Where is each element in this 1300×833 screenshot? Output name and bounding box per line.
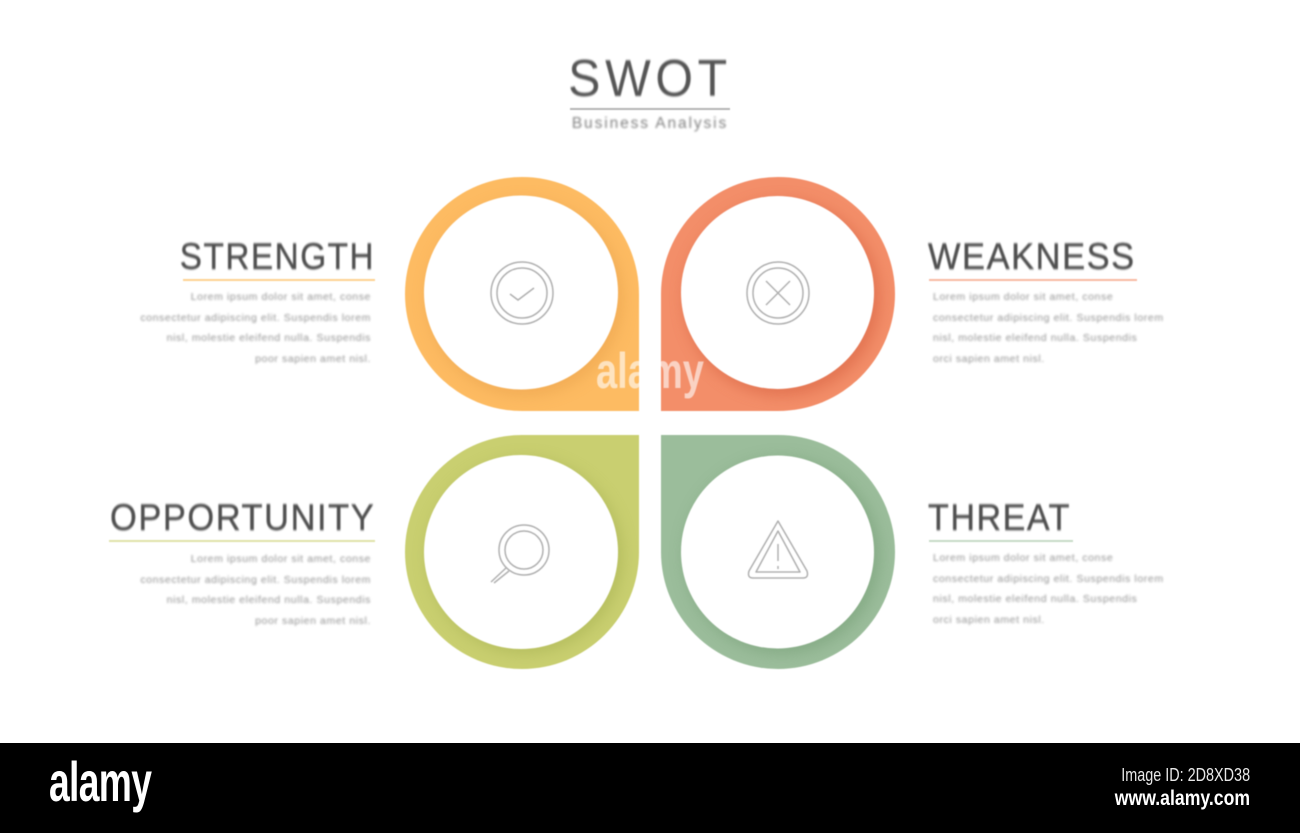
strength text: Lorem ipsum dolor sit amet, conse	[191, 291, 371, 303]
threat heading: THREAT	[928, 497, 1071, 538]
weakness text: consectetur adipiscing elit. Suspendis lorem	[933, 312, 1164, 324]
icon: check badge	[491, 262, 553, 324]
title rule	[570, 108, 730, 110]
image id: Image ID: 2D8XD38	[1121, 765, 1250, 785]
opportunity text	[140, 553, 371, 627]
website: www.alamy.com	[1115, 787, 1250, 810]
panel: strength teardrop	[405, 177, 639, 411]
weakness text: Lorem ipsum dolor sit amet, conse	[933, 291, 1113, 303]
footer bar	[0, 743, 1300, 833]
subtitle: Business Analysis	[572, 115, 728, 132]
opportunity text: consectetur adipiscing elit. Suspendis lorem	[140, 574, 371, 586]
title: SWOT	[568, 50, 732, 108]
threat text: nisl, molestie eleifend nulla. Suspendis	[933, 593, 1137, 605]
strength rule	[183, 279, 375, 281]
weakness text: orci sapien amet nisl.	[933, 353, 1045, 365]
panel: opportunity teardrop	[405, 435, 639, 669]
SWOT diagram	[404, 176, 896, 670]
panel: weakness teardrop	[661, 177, 895, 411]
opportunity heading: OPPORTUNITY	[110, 497, 375, 538]
strength heading: STRENGTH	[180, 236, 375, 277]
weakness text	[932, 291, 1164, 365]
opportunity text: Lorem ipsum dolor sit amet, conse	[191, 553, 371, 565]
threat text	[932, 552, 1164, 626]
threat text: orci sapien amet nisl.	[933, 614, 1045, 626]
icon: cross badge	[747, 262, 809, 324]
opportunity text: nisl, molestie eleifend nulla. Suspendis	[167, 594, 371, 606]
threat text: consectetur adipiscing elit. Suspendis lorem	[933, 573, 1164, 585]
panel: threat teardrop	[661, 435, 895, 669]
opportunity text: poor sapien amet nisl.	[255, 615, 371, 627]
footer logo: alamy	[49, 750, 151, 813]
strength text: poor sapien amet nisl.	[255, 353, 371, 365]
opportunity rule	[109, 540, 375, 542]
strength text: nisl, molestie eleifend nulla. Suspendis	[167, 332, 371, 344]
icon: warning triangle	[748, 521, 808, 578]
threat rule	[929, 540, 1073, 542]
icon: magnifier	[491, 525, 549, 583]
weakness heading: WEAKNESS	[928, 236, 1136, 277]
strength text: consectetur adipiscing elit. Suspendis lorem	[140, 312, 371, 324]
weakness text: nisl, molestie eleifend nulla. Suspendis	[933, 332, 1137, 344]
watermark: alamy: alamy	[596, 343, 704, 399]
strength text	[140, 291, 371, 365]
threat text: Lorem ipsum dolor sit amet, conse	[933, 552, 1113, 564]
weakness rule	[929, 279, 1137, 281]
